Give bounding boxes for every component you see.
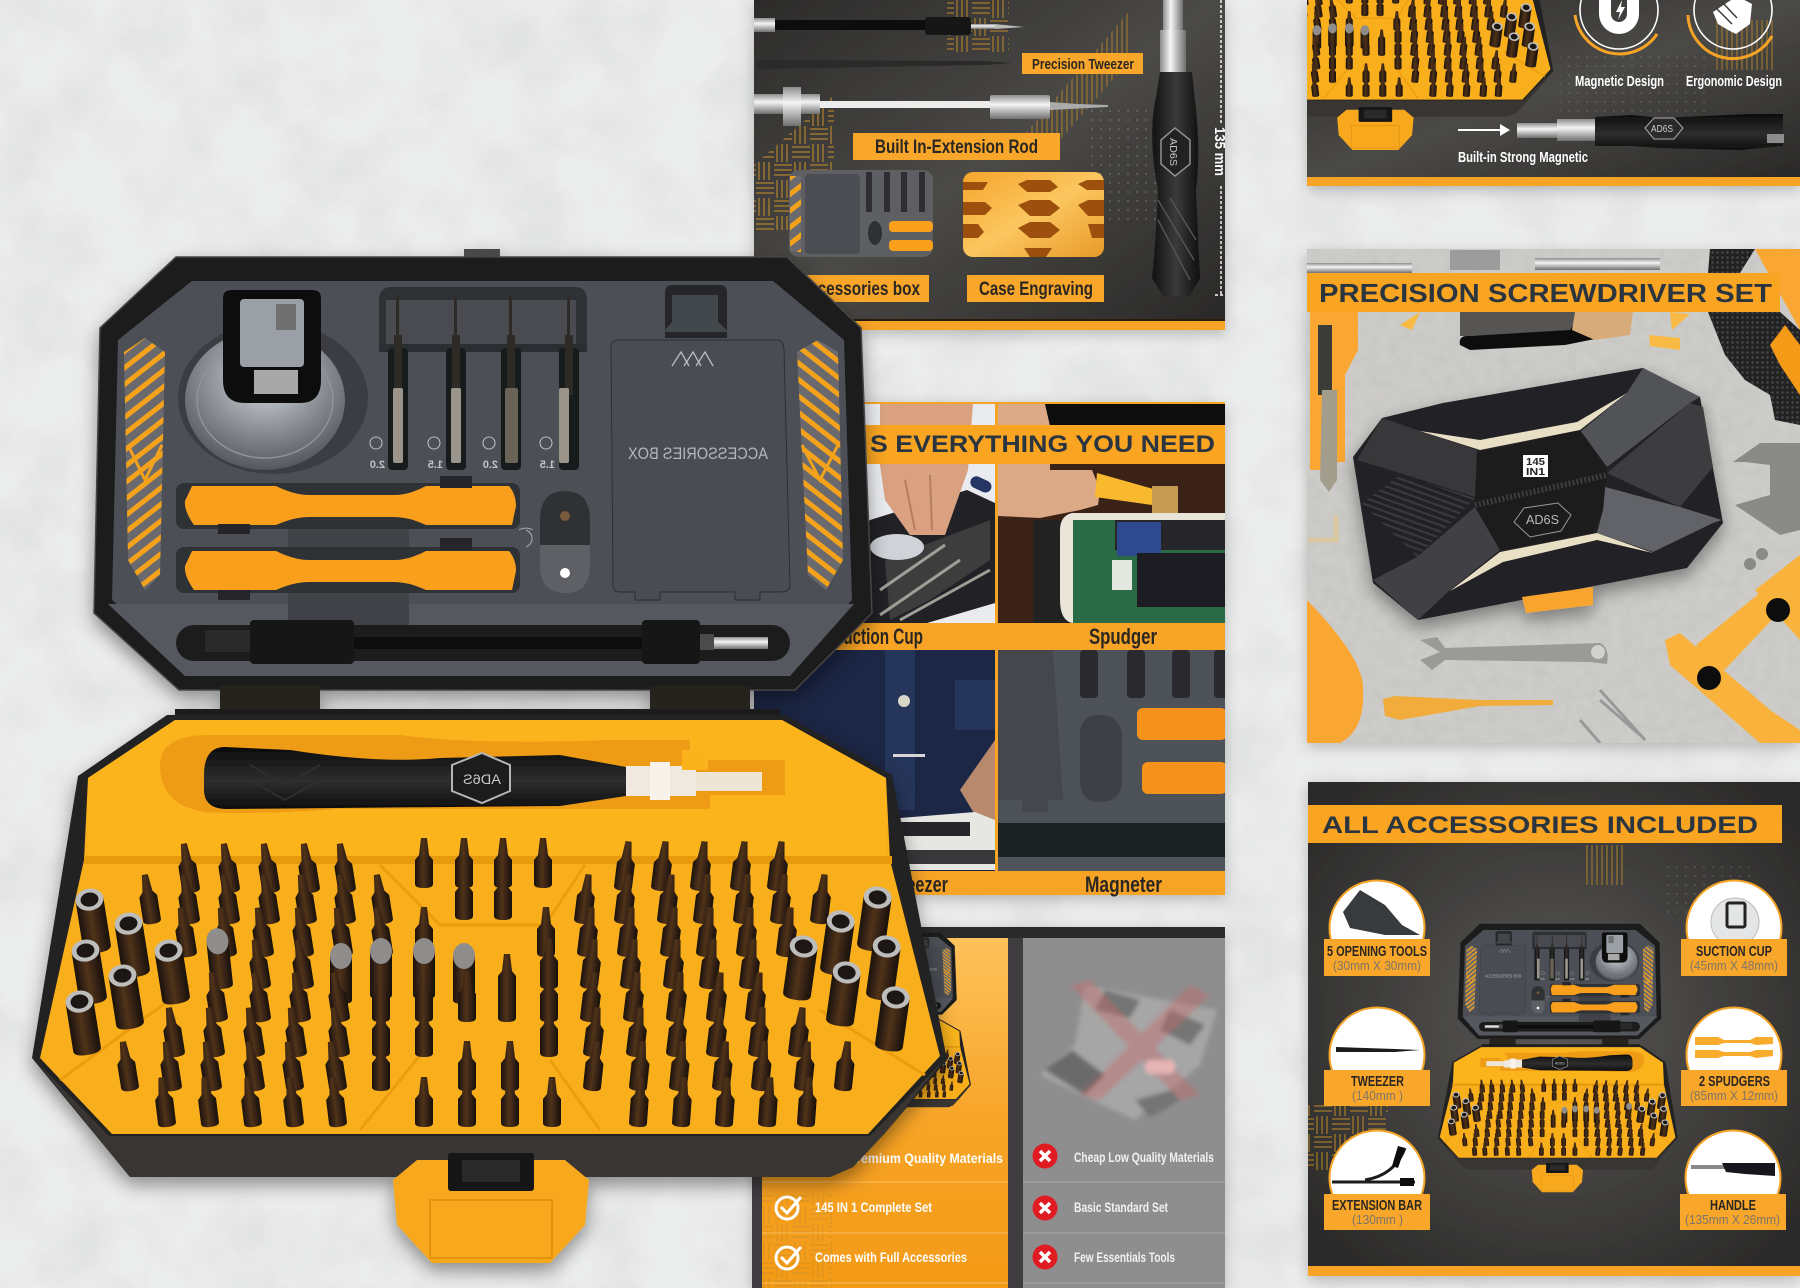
heading: precision screwdriver set: PRECISION SCREWDRIVER SET — [1319, 278, 1772, 308]
item: suction cup: SUCTION CUP — [1696, 943, 1772, 960]
row: cheap: Cheap Low Quality Materials — [1074, 1149, 1214, 1165]
tool: horizontal screwdriver: AD6S — [1651, 124, 1673, 135]
product: closed case: 145 — [1526, 457, 1545, 468]
kit crop — [1196, 0, 1553, 150]
item: opening tools: 5 OPENING TOOLS — [1327, 943, 1427, 960]
icon: cross — [1032, 1144, 1058, 1168]
item: extension bar — [1324, 1130, 1430, 1230]
caption: Suction Cup: Suction Cup — [833, 624, 923, 649]
item: tweezer: (140mm ) — [1352, 1089, 1403, 1103]
image: accessories box — [789, 170, 933, 257]
label: Built In-Extension Rod — [853, 133, 1060, 160]
caption: Spudger: Spudger — [1089, 624, 1157, 649]
tool: extension rod — [754, 87, 1108, 126]
main product: open screwdriver kit — [32, 249, 947, 1263]
caption: Tweezer: Tweezer — [885, 872, 948, 897]
label: Built In-Extension Rod: Built In-Extension Rod — [875, 137, 1038, 158]
tool: anchors — [1400, 312, 1690, 350]
label: Magnetic Design: Magnetic Design — [1575, 73, 1664, 90]
item: extension bar: EXTENSION BAR — [1332, 1197, 1422, 1214]
row: few tools: Few Essentials Tools — [1074, 1249, 1175, 1265]
tool: voltage tester — [1383, 696, 1553, 720]
panel: tool close-ups — [754, 0, 1228, 330]
tool: gloves — [1708, 249, 1800, 425]
product: closed case: IN1 — [1526, 467, 1546, 478]
tool: angle ruler — [1665, 555, 1800, 743]
icon: check — [776, 1247, 801, 1269]
column: this set — [762, 931, 1008, 1288]
dimension: 135 mm — [1211, 0, 1228, 295]
item: opening tools — [1324, 880, 1430, 976]
column: other sets — [1023, 938, 1225, 1288]
label: Precision Tweezer: Precision Tweezer — [1032, 56, 1134, 73]
icon: check — [776, 1197, 801, 1219]
panel: includes everything you need — [754, 402, 1228, 897]
tool: pliers — [1460, 312, 1633, 350]
item: spudgers: (85mm X 12mm) — [1690, 1089, 1778, 1103]
tool: adjustable wrench — [1733, 443, 1800, 535]
label: Built-in Strong Magnetic: Built-in Strong Magnetic — [1458, 149, 1588, 166]
tool: horizontal screwdriver — [1517, 114, 1784, 150]
item: suction cup — [1681, 880, 1787, 976]
item: spudgers — [1681, 1008, 1787, 1106]
panel: precision screwdriver set — [1307, 249, 1800, 743]
item: tweezer — [1324, 1008, 1430, 1106]
heading: all accessories included: ALL ACCESSORIES INCLUDED — [1322, 812, 1758, 839]
tool: utility knife — [1310, 312, 1358, 492]
icon: cross — [1032, 1244, 1058, 1270]
panel: all accessories included — [1308, 782, 1800, 1276]
tool: allen key — [1308, 515, 1336, 540]
tool: precision driver — [754, 17, 1024, 35]
icon: ergonomic grip — [1688, 0, 1772, 59]
panel: comparison — [752, 927, 1225, 1288]
item: handle: (135mm X 26mm) — [1685, 1213, 1780, 1227]
photo: spudger — [998, 404, 1225, 623]
photo: magneter — [998, 650, 1228, 871]
panel: magnetic and ergonomic — [1300, 0, 1800, 196]
row: premium quality: Premium Quality Materials — [848, 1150, 1003, 1166]
product: closed case — [1353, 368, 1723, 620]
label: Precision Tweezer — [1022, 53, 1143, 74]
item: spudgers: 2 SPUDGERS — [1699, 1073, 1770, 1090]
label: Case Engraving — [967, 275, 1104, 302]
tool: combination wrench — [1420, 637, 1608, 670]
item: handle: HANDLE — [1710, 1197, 1756, 1214]
mini kit behind main kit — [797, 931, 971, 1123]
heading: everything you need: S EVERYTHING YOU NEED — [870, 431, 1215, 458]
tool: nails — [1580, 690, 1645, 743]
icon: magnet — [1575, 0, 1658, 54]
blurred competing kit with red cross — [1040, 980, 1217, 1120]
tool: vertical screwdriver: AD6S — [1167, 138, 1178, 166]
tool: tweezer — [757, 60, 1013, 69]
item: handle — [1680, 1130, 1786, 1230]
tool: vertical screwdriver — [1152, 0, 1200, 296]
arrow — [1458, 124, 1510, 136]
icon: cross — [1032, 1196, 1058, 1220]
product: open kit — [1438, 921, 1678, 1192]
label: Case Engraving: Case Engraving — [979, 279, 1093, 300]
caption: Magneter: Magneter — [1085, 872, 1162, 897]
item: opening tools: (30mm X 30mm) — [1333, 959, 1421, 973]
image: case engraving — [963, 172, 1104, 257]
row: full accessories: Comes with Full Accessories — [815, 1249, 967, 1265]
tool: hex nuts — [1744, 548, 1768, 570]
label: accessories box: Accessories box — [798, 279, 920, 300]
label: accessories box — [790, 275, 929, 302]
item: suction cup: (45mm X 48mm) — [1690, 959, 1778, 973]
dimension: 135 mm: 135 mm — [1211, 127, 1228, 176]
product: closed case: AD6S — [1526, 512, 1559, 527]
row: complete set: 145 IN 1 Complete Set — [815, 1199, 932, 1215]
row: basic: Basic Standard Set — [1074, 1199, 1168, 1215]
photo: suction cup — [863, 404, 995, 623]
item: tweezer: TWEEZER — [1351, 1073, 1404, 1090]
tool: top bits — [1307, 250, 1660, 273]
item: extension bar: (130mm ) — [1352, 1213, 1403, 1227]
photo: tweezer — [754, 650, 995, 871]
